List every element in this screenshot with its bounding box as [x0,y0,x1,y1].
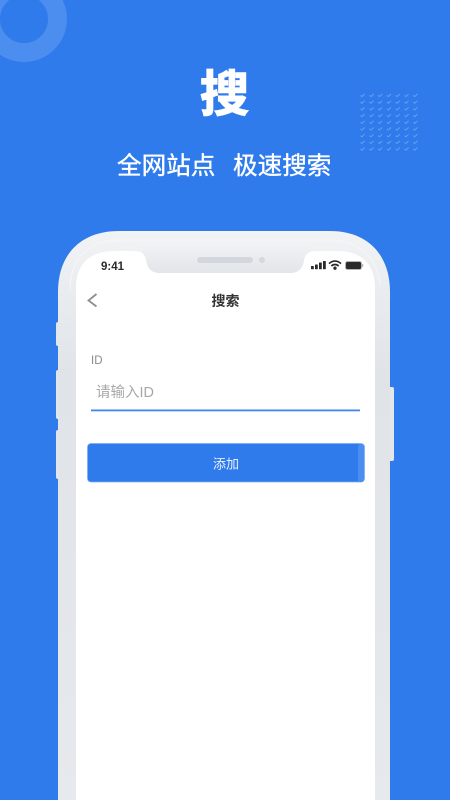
signal icon [311,261,326,269]
status time: 9:41 [101,261,125,273]
camera [259,257,265,263]
phone frame [58,231,390,800]
back chevron [88,294,96,306]
speaker [197,257,253,263]
field label: ID [91,355,102,367]
notch [140,245,310,273]
check mark pattern [360,94,417,150]
title: 搜 [200,68,249,122]
decorative ring [0,0,58,52]
input underline [91,410,360,411]
page title: 搜索 [212,293,240,309]
screen [76,251,375,800]
side button right [386,387,394,461]
side buttons left [56,322,62,479]
subtitle second phrase: 极速搜索 [233,152,331,180]
button label: 添加 [213,456,239,472]
input placeholder: 请输入ID [96,384,154,401]
wifi icon [329,261,341,269]
add button [88,444,364,482]
subtitle: 全网站点 [117,152,215,180]
battery icon [346,262,363,270]
phone mockup [56,231,394,800]
frame highlight [70,240,380,290]
